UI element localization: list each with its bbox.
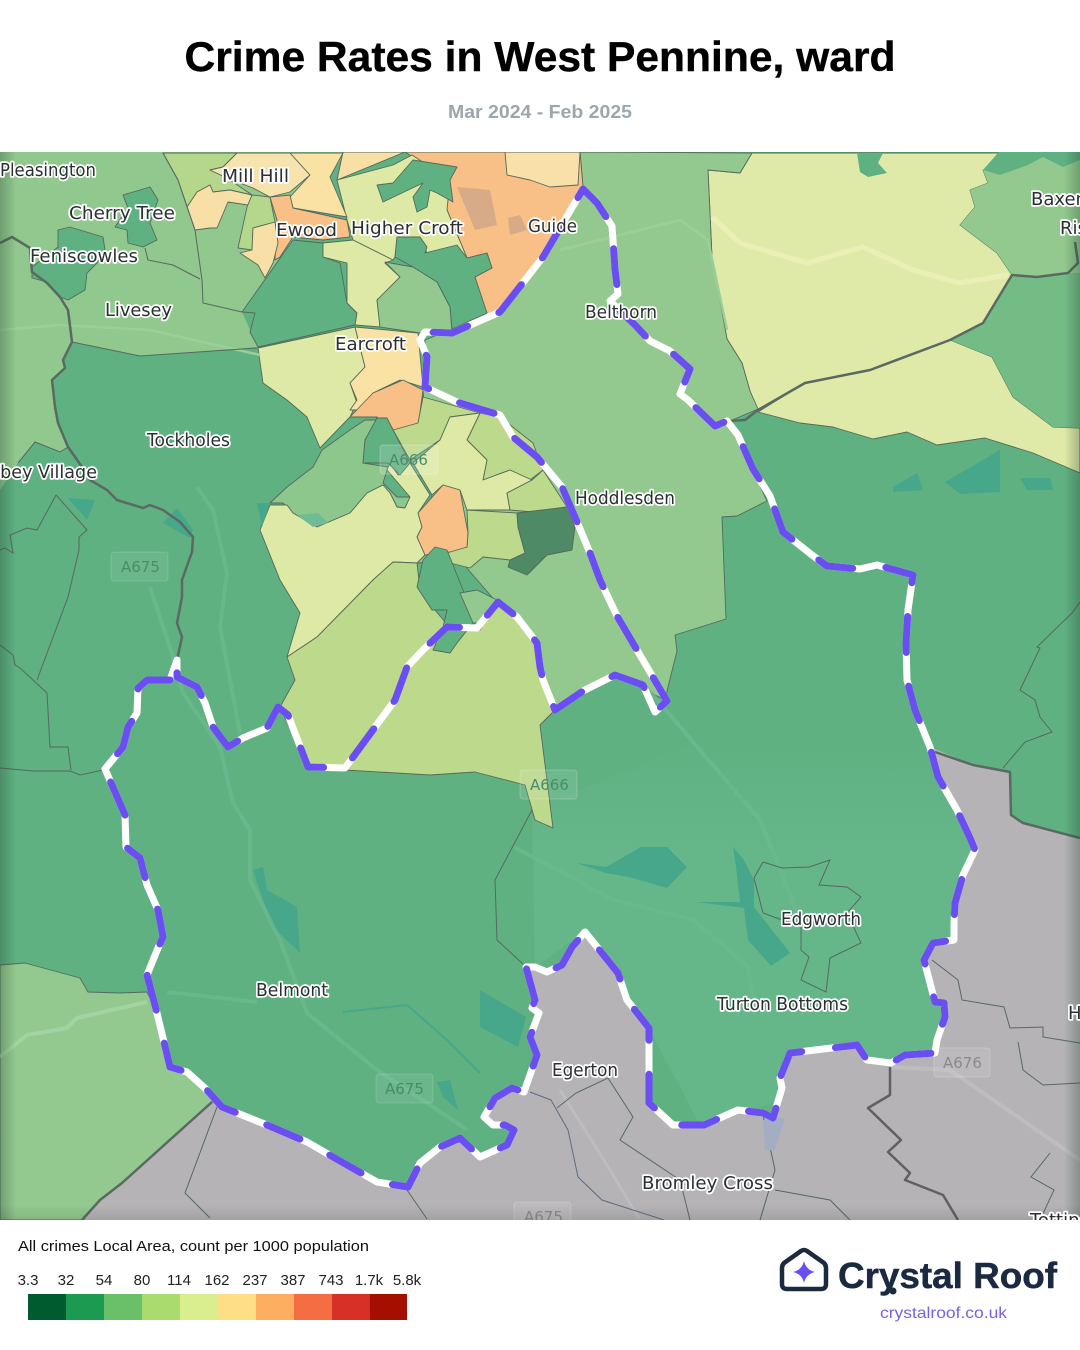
- area: Higher Croft south green: [395, 237, 492, 329]
- place labels: Egerton: [552, 1060, 618, 1081]
- place labels: Mill Hill: [222, 166, 289, 187]
- legend tick labels: 162: [204, 1272, 230, 1289]
- area: small yellow green: [238, 195, 275, 250]
- road badges: A675: [121, 558, 160, 576]
- place labels: Ewood: [276, 220, 337, 241]
- road badges: [111, 445, 990, 1231]
- area: east pale yellow: [758, 340, 1080, 473]
- legend tick labels: 1.7k: [355, 1272, 384, 1289]
- boundary lines: district borders: [0, 237, 1080, 1220]
- area: Earcroft peach: [350, 380, 423, 430]
- area: far northeast light green: [960, 153, 1080, 277]
- wordmark: Crystal Roof: [838, 1255, 1058, 1296]
- place labels: Belthorn: [585, 302, 657, 323]
- place labels: Turton Bottoms: [716, 994, 848, 1015]
- legend title: All crimes Local Area, count per 1000 population: [18, 1238, 369, 1255]
- legend tick labels: 237: [242, 1272, 268, 1289]
- place labels: Bromley Cross: [642, 1173, 773, 1194]
- river and roads: [0, 217, 1080, 1220]
- area: grey outside data region: [82, 747, 1080, 1220]
- area: Ewood cream: [240, 222, 278, 278]
- legend tick labels: 114: [167, 1272, 191, 1289]
- area: central west light green: [270, 420, 410, 527]
- icon: house with star: [782, 1250, 826, 1289]
- place labels: Guide: [528, 216, 577, 237]
- area: A666 green diamond: [363, 418, 410, 475]
- road badges: A675: [385, 1080, 424, 1098]
- area: central peach: [417, 485, 468, 555]
- boundary lines: thin parish borders: [0, 153, 1080, 1220]
- area: Higher Croft pale yellow: [337, 155, 467, 260]
- water and woodland patches: [68, 450, 1053, 1110]
- place labels: Tockholes: [146, 430, 230, 451]
- patches: grey brown in peach: [457, 187, 497, 230]
- place labels: Feniscowles: [30, 246, 138, 267]
- area: central yellow green north: [393, 397, 480, 460]
- road badges: A666: [530, 776, 569, 794]
- website url: crystalroof.co.uk: [880, 1305, 1008, 1322]
- logo: Crystal Roof: [780, 1248, 1058, 1322]
- place labels: Hoddlesden: [575, 488, 675, 509]
- area: Higher Croft dark patch: [377, 160, 457, 212]
- area: central cream: [290, 153, 347, 217]
- grey district blue patch: [763, 1118, 785, 1150]
- area: Earcroft cream: [350, 327, 423, 410]
- patches: top right dark green: [857, 153, 887, 177]
- area: top yellow green wedge: [163, 153, 252, 207]
- area: darkest green: [508, 507, 575, 575]
- area: northeast pale yellow: [708, 153, 1012, 410]
- area: lighter woodland east of ward: [532, 740, 975, 1125]
- legend tick labels: 32: [58, 1272, 74, 1289]
- legend tick labels: 80: [134, 1272, 150, 1289]
- area: central pale yellow: [413, 413, 532, 510]
- area: Earcroft pale yellow: [258, 327, 365, 448]
- place labels: Edgworth: [781, 909, 861, 930]
- area: Blackburn top peach: [405, 152, 583, 318]
- area: south yellow green: [280, 562, 555, 828]
- area: top-left light green: [0, 152, 345, 490]
- subtitle: date range: Mar 2024 - Feb 2025: [448, 102, 632, 122]
- title: Crime Rates in West Pennine, ward: [184, 33, 896, 80]
- road badges: A676: [943, 1054, 982, 1072]
- area: east mid light green: [950, 273, 1080, 428]
- place labels: Cherry Tree: [69, 203, 175, 224]
- legend tick labels: [18, 1272, 422, 1289]
- area: light green pocket: [377, 262, 452, 333]
- map base: mid green areas: [0, 152, 1080, 1220]
- area: pale yellow strip: [323, 240, 400, 327]
- legend tick labels: 3.3: [18, 1272, 38, 1289]
- legend tick labels: 5.8k: [393, 1272, 422, 1289]
- legend tick labels: 387: [280, 1272, 306, 1289]
- place labels: Earcroft: [335, 334, 406, 355]
- legend colour scale: [28, 1294, 407, 1320]
- choropleth map: [0, 152, 1080, 1220]
- area: bottom-left light green: [0, 963, 222, 1220]
- area: Cherry Tree green: [115, 187, 158, 247]
- place labels: Higher Croft: [351, 218, 463, 239]
- map edge vignette: [0, 152, 1080, 1220]
- area: Hoddlesden and Belthorn light green: [417, 152, 767, 712]
- area: yellow green by dark patch: [507, 470, 567, 512]
- place labels: Belmont: [256, 980, 328, 1001]
- legend tick labels: 54: [96, 1272, 112, 1289]
- place labels: Pleasington: [0, 160, 96, 181]
- road badges: A666: [389, 451, 428, 469]
- place labels: Livesey: [105, 300, 172, 321]
- area: vertical green strip: [417, 547, 473, 653]
- area: Feniscowles green: [32, 227, 105, 300]
- area: large pale yellow west: [260, 463, 430, 657]
- legend tick labels: 743: [318, 1272, 344, 1289]
- patches: teal near central west: [257, 503, 270, 527]
- area: Ewood south green: [242, 240, 357, 347]
- area: top cream: [505, 152, 580, 187]
- area: Mill Hill cream: [210, 153, 310, 197]
- ward boundary: West Pennine: [105, 189, 975, 1187]
- legend: [18, 1238, 422, 1320]
- area: Ewood peach: [270, 195, 350, 260]
- place labels: [0, 160, 1080, 1231]
- area: top-left cream: [187, 185, 252, 230]
- area: small light green: [460, 590, 497, 623]
